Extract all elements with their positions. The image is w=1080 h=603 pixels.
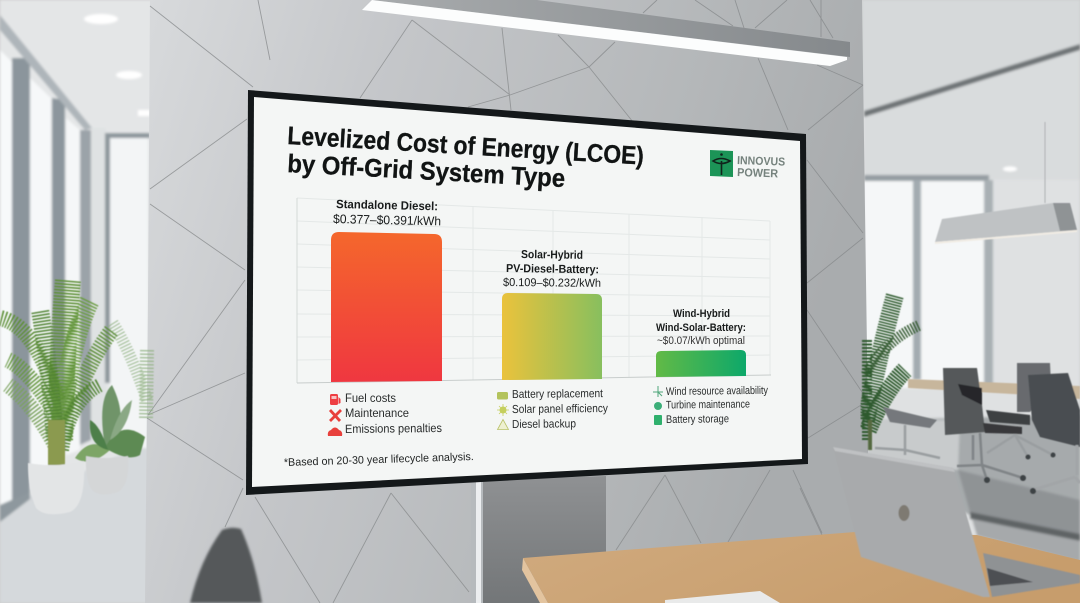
bar label: standalone diesel: $0.377–$0.391/kWh bbox=[333, 212, 441, 228]
icon: fuel pump bbox=[330, 394, 340, 405]
bar label: wind hybrid bbox=[656, 308, 746, 347]
legend: solar cost factors: Battery replacement bbox=[512, 388, 604, 401]
legend: diesel cost factors: Maintenance bbox=[345, 406, 409, 420]
icon: battery storage bbox=[654, 415, 662, 425]
icon: battery bbox=[497, 392, 508, 400]
logo: Innovus Power: POWER bbox=[737, 167, 779, 180]
logo: Innovus Power: INNOVUS bbox=[737, 155, 786, 169]
bar: solar hybrid bbox=[502, 249, 602, 380]
bar: standalone diesel bbox=[331, 197, 442, 382]
title bbox=[287, 122, 645, 193]
monitor screen bbox=[252, 97, 802, 487]
bar label: wind hybrid: ~$0.07/kWh optimal bbox=[657, 335, 745, 347]
legend: solar cost factors: Diesel backup bbox=[512, 418, 576, 431]
icon: wind turbine bbox=[653, 386, 663, 397]
legend: wind cost factors: Turbine maintenance bbox=[666, 398, 750, 411]
legend: wind cost factors bbox=[653, 385, 768, 426]
foreground chair bbox=[190, 528, 262, 603]
icon: emissions cloud bbox=[328, 428, 342, 436]
legend: solar cost factors: Solar panel efficiency bbox=[512, 403, 608, 416]
icon: tools bbox=[330, 410, 341, 421]
paper on desk bbox=[665, 591, 780, 603]
logo: Innovus Power bbox=[710, 150, 786, 180]
legend: diesel cost factors: Emissions penalties bbox=[345, 421, 442, 436]
laptop bbox=[833, 447, 1080, 597]
legend: wind cost factors: Battery storage bbox=[666, 413, 729, 426]
second plant leaves bbox=[75, 385, 145, 462]
wall with geometric lines bbox=[145, 0, 868, 603]
bar label: standalone diesel bbox=[333, 197, 441, 228]
desk bbox=[522, 532, 1080, 603]
title: Levelized Cost of Energy (LCOE) bbox=[287, 122, 645, 171]
wall monitor bbox=[246, 90, 808, 495]
bar label: solar hybrid: $0.109–$0.232/kWh bbox=[503, 277, 601, 290]
left corridor background bbox=[0, 0, 152, 603]
legend: diesel cost factors: Fuel costs bbox=[345, 391, 396, 405]
icon: sun bbox=[497, 404, 509, 416]
legend: diesel cost factors bbox=[328, 391, 442, 436]
ceiling light fixture bbox=[362, 0, 850, 66]
icon: warning triangle bbox=[498, 420, 508, 430]
monitor frame bbox=[246, 90, 808, 495]
right meeting room background bbox=[862, 0, 1080, 603]
bar label: solar hybrid bbox=[503, 249, 601, 290]
bar label: wind hybrid: Wind-Hybrid bbox=[673, 308, 730, 320]
right plant bbox=[866, 295, 920, 450]
bar: wind hybrid bbox=[656, 308, 746, 377]
left potted plants bbox=[0, 280, 147, 514]
far plant bbox=[112, 322, 147, 420]
title: by Off-Grid System Type bbox=[287, 150, 566, 193]
meeting table and chairs bbox=[875, 363, 1080, 494]
footnote: *Based on 20-30 year lifecycle analysis. bbox=[284, 451, 474, 469]
bar label: wind hybrid: Wind-Solar-Battery: bbox=[656, 322, 746, 334]
palm fronds bbox=[0, 280, 112, 450]
pots bbox=[28, 461, 84, 514]
chart grid bbox=[297, 198, 771, 383]
legend: wind cost factors: Wind resource availability bbox=[666, 385, 768, 398]
icon: laptop logo bbox=[898, 505, 910, 521]
pendant lamp bbox=[935, 122, 1077, 244]
bar label: standalone diesel: Standalone Diesel: bbox=[336, 197, 438, 213]
icon: turbine gear bbox=[654, 402, 662, 410]
legend: solar cost factors bbox=[497, 388, 608, 431]
icon: logo mark bbox=[710, 150, 733, 177]
monitor stand bbox=[471, 476, 606, 603]
bar label: solar hybrid: PV-Diesel-Battery: bbox=[506, 263, 599, 276]
bar label: solar hybrid: Solar-Hybrid bbox=[521, 249, 583, 262]
palm trunk bbox=[48, 420, 65, 465]
